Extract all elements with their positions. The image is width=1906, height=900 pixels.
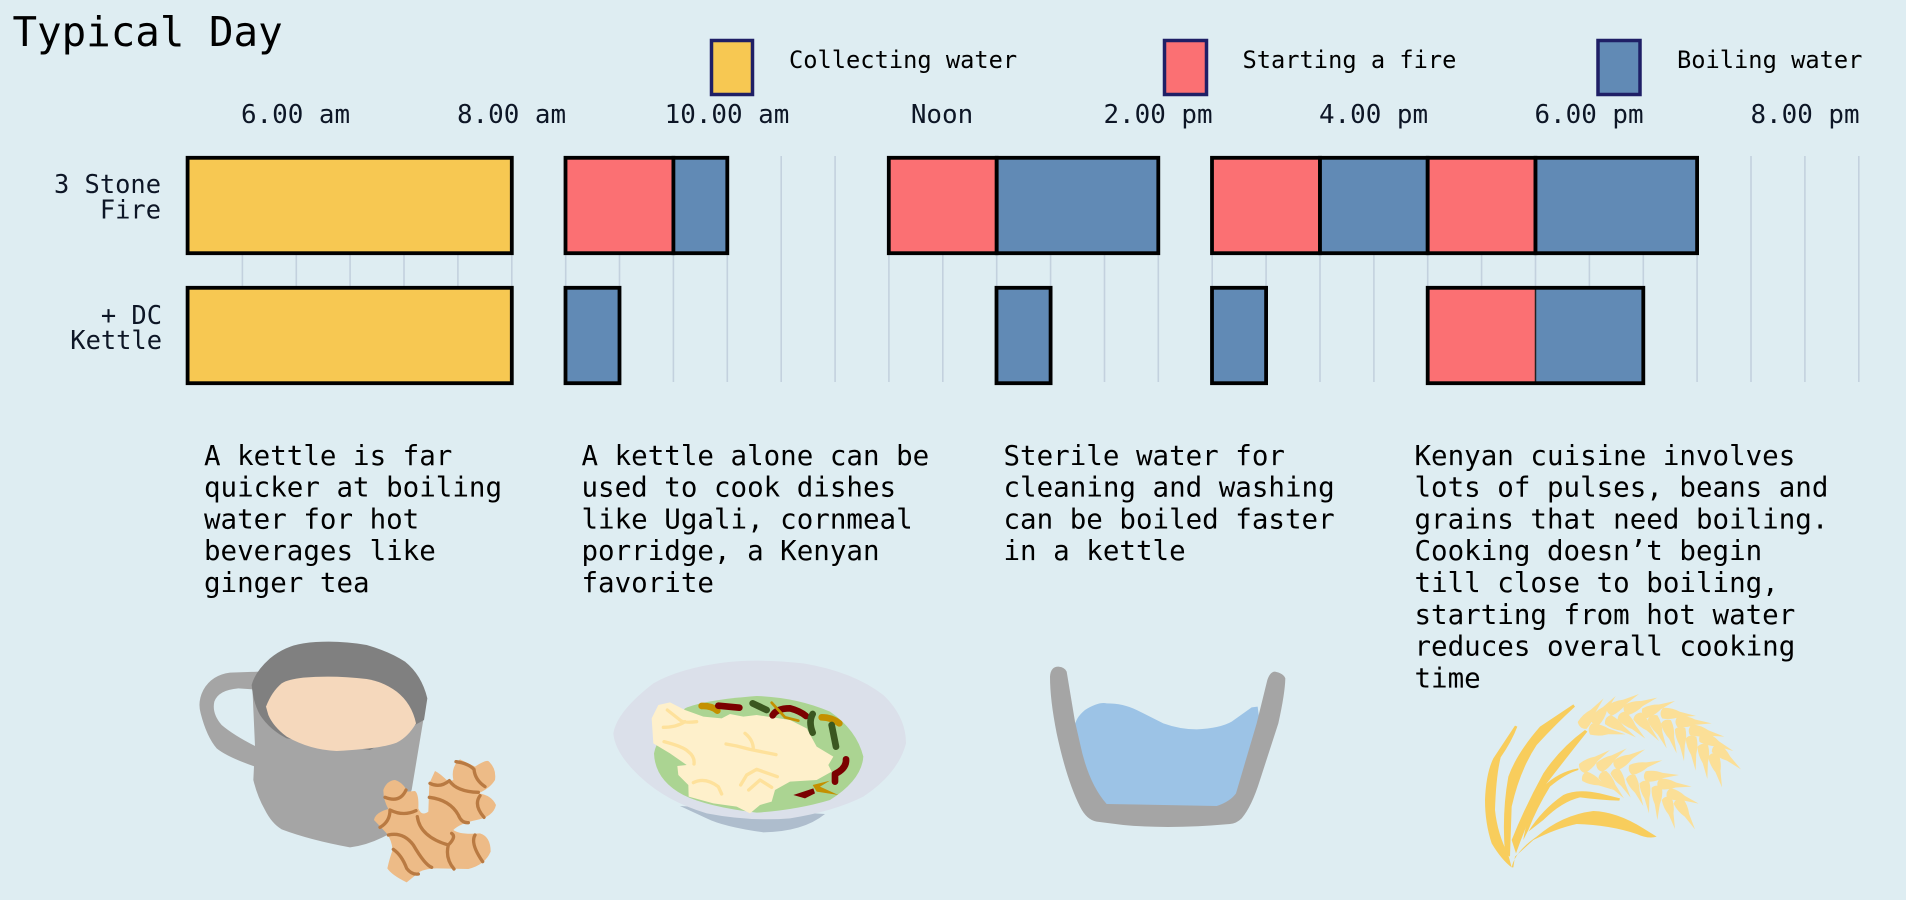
text: tea: beverages like <box>204 535 436 567</box>
title: Typical Day <box>12 8 283 56</box>
text: ugali: favorite <box>582 567 714 599</box>
legend: starting a fire: Starting a fire <box>1242 46 1456 74</box>
row label: DC kettle: + DC <box>101 300 162 330</box>
text: sterile water: Sterile water for <box>1004 440 1285 472</box>
row label: 3 stone fire <box>54 169 161 224</box>
text: kenyan cuisine: Kenyan cuisine involves <box>1414 440 1795 472</box>
text: ugali <box>582 440 929 599</box>
legend: boiling water <box>1598 40 1862 94</box>
icon: grain stalks <box>1485 689 1745 867</box>
legend: collecting water: Collecting water <box>789 46 1017 74</box>
legend: starting a fire <box>1164 40 1456 94</box>
text: sterile water: cleaning and washing <box>1004 472 1335 504</box>
text: kenyan cuisine: Cooking doesn’t begin <box>1414 535 1762 567</box>
row label: DC kettle <box>70 300 162 355</box>
text: kenyan cuisine: reduces overall cooking <box>1414 630 1795 662</box>
time axis labels: 8.00 pm <box>1750 100 1860 130</box>
row label: DC kettle: Kettle <box>70 325 162 355</box>
time axis labels: 6.00 am <box>241 100 350 130</box>
text: sterile water: can be boiled faster <box>1004 504 1335 536</box>
text: ugali: like Ugali, cornmeal <box>582 504 913 536</box>
timeline row: 3 stone fire <box>188 158 1697 253</box>
row label: 3 stone fire: Fire <box>100 194 161 224</box>
row label: 3 stone fire: 3 Stone <box>54 169 161 199</box>
legend <box>712 40 1862 94</box>
timeline row: DC kettle <box>188 288 1643 383</box>
time axis labels: Noon <box>911 100 973 130</box>
icon: mug of tea with ginger <box>199 642 496 882</box>
text: kenyan cuisine: time <box>1414 662 1481 694</box>
time axis labels: 2.00 pm <box>1103 100 1213 130</box>
text: ugali: A kettle alone can be <box>582 440 929 472</box>
text: kenyan cuisine: grains that need boiling. <box>1414 504 1828 536</box>
icon: bowl of ugali <box>613 661 906 832</box>
time axis labels <box>241 100 1860 130</box>
time axis labels: 6.00 pm <box>1534 100 1644 130</box>
text: tea <box>204 440 502 599</box>
text: tea: A kettle is far <box>204 440 452 472</box>
text: kenyan cuisine: lots of pulses, beans and <box>1414 472 1828 504</box>
text: ugali: used to cook dishes <box>582 472 896 504</box>
time axis labels: 8.00 am <box>457 100 566 130</box>
legend: collecting water <box>712 40 1017 94</box>
text: tea: water for hot <box>204 504 419 536</box>
grid lines <box>242 156 1859 382</box>
time axis labels: 4.00 pm <box>1319 100 1428 130</box>
text: tea: quicker at boiling <box>204 472 502 504</box>
text: kenyan cuisine <box>1414 440 1828 694</box>
icon: kettle with water <box>1050 667 1285 827</box>
legend: boiling water: Boiling water <box>1677 46 1862 74</box>
text: kenyan cuisine: till close to boiling, <box>1414 567 1779 599</box>
text: sterile water <box>1004 440 1335 567</box>
text: kenyan cuisine: starting from hot water <box>1414 599 1795 631</box>
text: ugali: porridge, a Kenyan <box>582 535 880 567</box>
text: tea: ginger tea <box>204 567 370 599</box>
text: sterile water: in a kettle <box>1004 535 1186 567</box>
time axis labels: 10.00 am <box>665 100 789 130</box>
